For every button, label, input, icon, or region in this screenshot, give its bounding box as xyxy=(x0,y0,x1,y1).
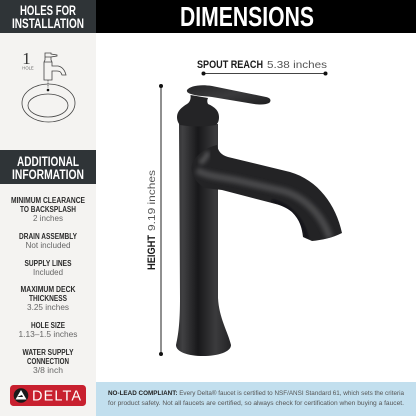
header: additional information: ADDITIONAL xyxy=(17,154,79,169)
spec: drain assembly: DRAIN ASSEMBLY xyxy=(19,232,78,241)
title bar: dimensions: DIMENSIONS xyxy=(180,1,314,32)
header: additional information xyxy=(0,150,96,184)
dimension: spout reach xyxy=(197,59,328,76)
spec: hole size xyxy=(18,321,78,339)
dimension: height: 9.19 inches xyxy=(146,170,158,231)
spec: maximum deck thickness xyxy=(20,285,76,312)
spec: minimum clearance: 2 inches xyxy=(33,214,63,223)
header: holes for installation: INSTALLATION xyxy=(12,16,84,31)
logo: delta xyxy=(10,385,86,406)
spec: maximum deck thickness: MAXIMUM DECK xyxy=(20,285,76,294)
spec: water supply connection: CONNECTION xyxy=(27,357,69,366)
callout: no-lead compliance: NO-LEAD COMPLIANT: Every Delta® faucet is certified to NSF/ANSI Standard 61, which sets the criteria xyxy=(108,389,404,397)
dimension: spout reach: 5.38 inches xyxy=(267,59,327,71)
header: holes for installation: HOLES FOR xyxy=(20,3,76,18)
spec: water supply connection: 3/8 inch xyxy=(33,366,63,375)
logo: delta: DELTA xyxy=(32,388,81,404)
faucet cap xyxy=(177,95,219,126)
icon: one hole sink diagram: 1 xyxy=(22,49,31,68)
dimension: spout reach: SPOUT REACH xyxy=(197,59,263,71)
spec: supply lines: Included xyxy=(33,268,63,277)
panel: left sidebar xyxy=(0,33,96,416)
spec: maximum deck thickness: THICKNESS xyxy=(29,294,67,303)
spec: supply lines: SUPPLY LINES xyxy=(24,259,72,268)
header: holes for installation xyxy=(0,0,96,33)
icon: one hole sink diagram: HOLE xyxy=(22,66,34,70)
illustration: black faucet xyxy=(176,85,342,356)
spec: hole size: HOLE SIZE xyxy=(31,321,65,330)
spec: minimum clearance: MINIMUM CLEARANCE xyxy=(11,196,85,205)
faucet body xyxy=(176,124,231,356)
callout: no-lead compliance: for product safety. Not all faucets are certified, so always check for certification when buying a faucet. xyxy=(108,400,404,407)
spec: maximum deck thickness: 3.25 inches xyxy=(27,303,69,312)
dimension: height: HEIGHT xyxy=(146,235,158,270)
spec: drain assembly: Not included xyxy=(26,241,70,250)
title bar: dimensions xyxy=(96,0,416,33)
faucet spout xyxy=(192,145,342,241)
spec: minimum clearance: TO BACKSPLASH xyxy=(20,205,76,214)
spec: minimum clearance xyxy=(11,196,85,223)
spec: hole size: 1.13–1.5 inches xyxy=(18,330,78,339)
spec: water supply connection xyxy=(22,348,74,375)
callout: no-lead compliance xyxy=(96,382,416,416)
spec: supply lines xyxy=(24,259,72,277)
faucet handle xyxy=(187,85,270,104)
icon: one hole sink diagram xyxy=(22,49,75,122)
spec: water supply connection: WATER SUPPLY xyxy=(22,348,74,357)
spec: drain assembly xyxy=(19,232,78,250)
dimension: height xyxy=(146,84,163,356)
header: additional information: INFORMATION xyxy=(12,167,84,182)
